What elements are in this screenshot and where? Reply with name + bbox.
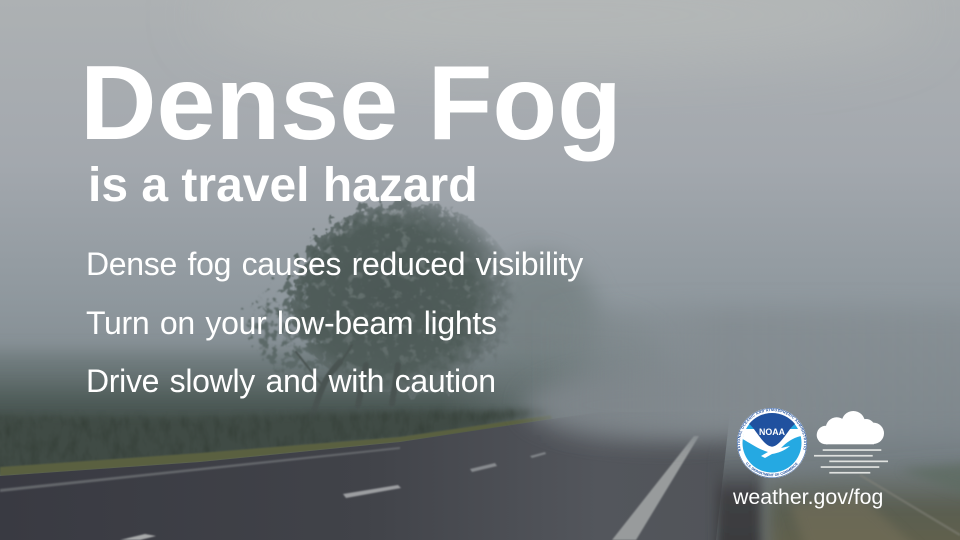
subtitle: is a travel hazard [88, 159, 478, 212]
roadside shoulder and grass right [716, 440, 960, 540]
title: Dense Fog [80, 44, 622, 162]
road surface [0, 412, 730, 540]
icon: fog cloud [814, 411, 888, 474]
field [0, 348, 553, 438]
icon: NOAA logo [737, 408, 807, 478]
distant tree line [480, 255, 665, 415]
text: key messages [86, 246, 584, 399]
fog over horizon [525, 371, 805, 439]
url: weather.gov/fog [733, 485, 883, 509]
road markings [0, 436, 699, 540]
icon: NOAA logo: U.S. DEPARTMENT OF COMMERCE [746, 462, 798, 476]
message 3: Drive slowly and with caution [86, 363, 496, 399]
message 2: Turn on your low-beam lights [86, 305, 497, 341]
grass verge [0, 410, 560, 476]
message 1: Dense fog causes reduced visibility [86, 246, 583, 282]
trees [250, 202, 518, 416]
icon: NOAA logo: NOAA [759, 427, 785, 438]
